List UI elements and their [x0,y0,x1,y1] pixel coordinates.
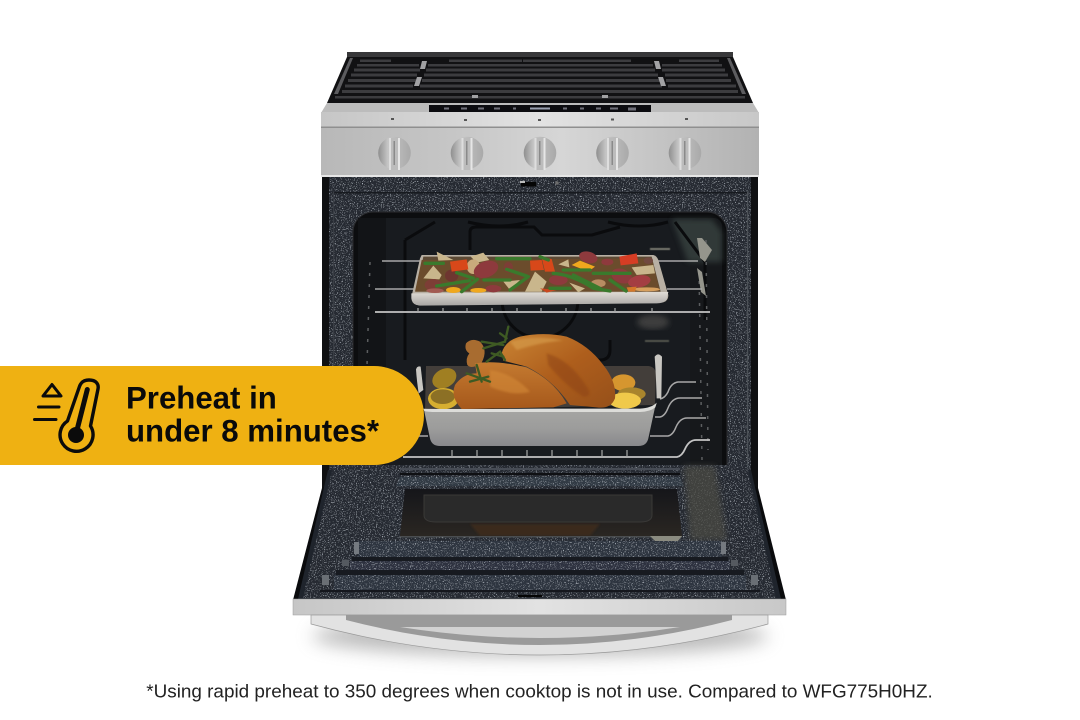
sheet pan of vegetables [411,249,668,306]
back wall details [405,222,705,360]
cooktop grates [327,52,753,103]
heading: preheat claim: under 8 minutes* [126,414,380,448]
knob 1 [378,137,411,170]
door handle [311,615,768,655]
roasting pan with turkey [416,327,662,446]
control panel [321,103,759,177]
door steps [320,541,760,597]
latch [520,181,559,186]
oven range [293,52,786,656]
floor shadow [312,616,768,656]
open oven door [293,465,786,655]
callout banner [0,366,424,465]
footnote: *Using rapid preheat to 350 degrees when cooktop is not in use. Compared to WFG775H0HZ. [146,682,933,702]
door steel edge [293,599,786,615]
door window [400,489,682,541]
lemons [428,364,646,409]
knob 3 [524,137,556,170]
knob 5 [669,137,701,170]
pan front [424,403,657,446]
vegetables [415,249,660,293]
knob marks [391,118,688,121]
icon: rising temperature thermometer [34,380,98,451]
touch display [429,105,651,112]
pan interior [425,366,656,410]
right side reflection [684,466,727,540]
pan handles [416,354,662,398]
door inner liner [303,465,776,598]
window reflection [672,219,722,262]
pan [412,255,668,305]
left and right rack guides [366,240,708,460]
upper oven rack [375,261,710,312]
oven cavity [353,212,727,502]
oven body frame [322,177,758,502]
turkey [453,334,615,409]
knob 2 [451,137,483,170]
lower oven rack [403,382,710,457]
knob 4 [596,137,629,170]
heading: preheat claim: Preheat in [126,380,277,416]
herbs [467,327,508,382]
door seal bands [396,468,684,486]
